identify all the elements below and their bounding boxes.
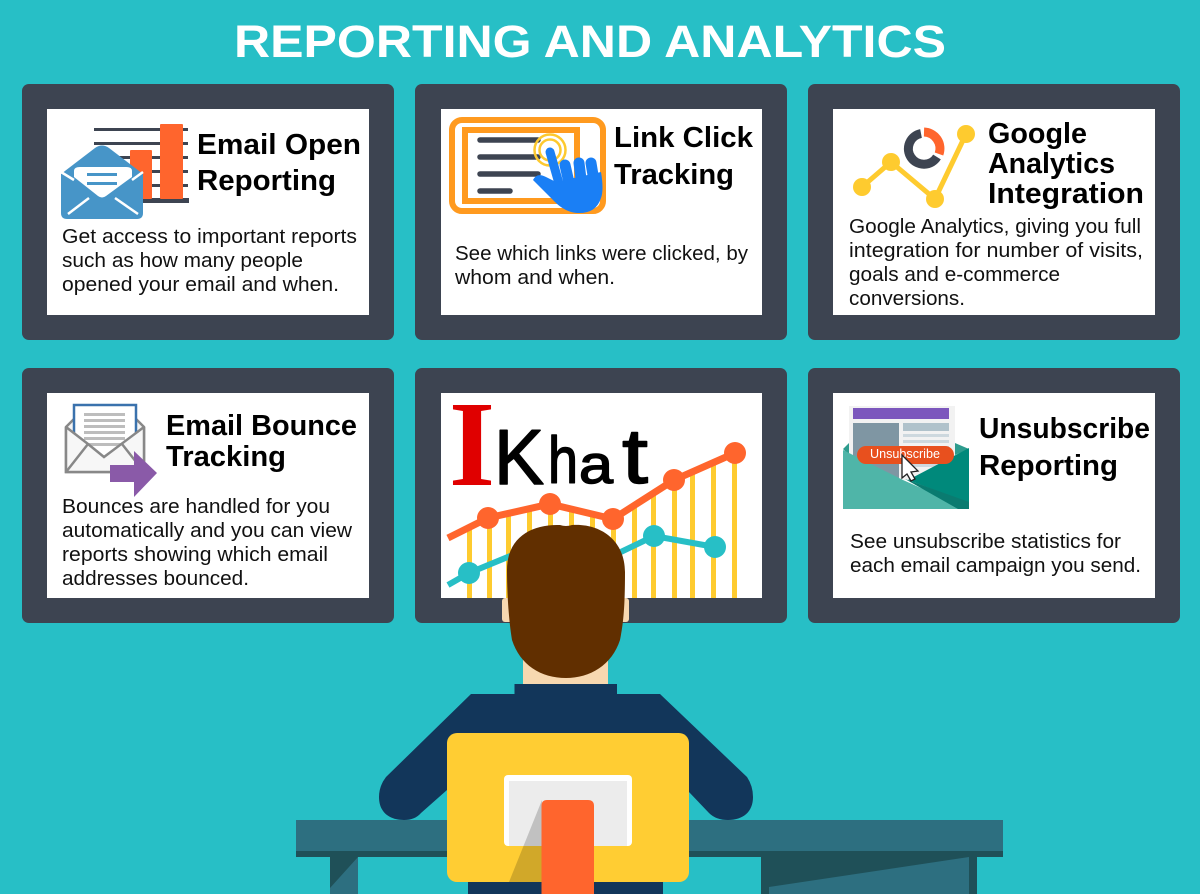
- logo: I Khat: a: [579, 435, 614, 495]
- heading: unsubscribe reporting: Reporting: [979, 450, 1118, 482]
- body text: unsubscribe: See unsubscribe statistics for: [850, 531, 1121, 553]
- logo: I Khat: [449, 377, 648, 512]
- ears: [502, 598, 629, 622]
- panel: link click tracking: [415, 84, 787, 340]
- body text: email open: Get access to important reports: [62, 226, 357, 248]
- heading: google analytics integration: Integration: [988, 178, 1144, 210]
- heading: unsubscribe reporting: Unsubscribe: [979, 413, 1150, 445]
- body text: email bounce: automatically and you can view: [62, 520, 353, 542]
- body text: google analytics: conversions.: [849, 288, 965, 310]
- chart: teal line: [448, 525, 726, 585]
- body text: google analytics: goals and e-commerce: [849, 264, 1060, 286]
- heading: google analytics integration: Analytics: [988, 148, 1115, 180]
- chart: orange line: [448, 442, 746, 538]
- body text: email bounce: reports showing which email: [62, 544, 328, 566]
- title: REPORTING AND ANALYTICS: [234, 16, 946, 67]
- person seen from behind: [379, 525, 753, 894]
- body text: email open: opened your email and when.: [62, 274, 339, 296]
- body text: link click: See which links were clicked, by: [455, 243, 748, 265]
- icon: bounced envelope: [66, 405, 157, 497]
- panel: ikhat monitor: [415, 368, 787, 623]
- desk: [296, 820, 1003, 894]
- logo: I Khat: h: [548, 423, 578, 497]
- body text: link click: whom and when.: [454, 267, 615, 289]
- body text: google analytics: integration for number of visits,: [849, 240, 1143, 262]
- logo: I Khat: t: [622, 412, 648, 500]
- chair: [447, 733, 689, 894]
- body text: email bounce: addresses bounced.: [62, 568, 249, 590]
- heading: link click tracking: Link Click: [614, 122, 754, 154]
- panel: google analytics integration: [808, 84, 1180, 340]
- logo: I Khat: I: [449, 377, 495, 512]
- heading: email bounce tracking: Tracking: [166, 441, 286, 473]
- heading: link click tracking: [614, 122, 754, 191]
- panel: email bounce tracking: [22, 368, 394, 623]
- chart: yellow bars: [467, 453, 737, 598]
- body text: email bounce: [62, 496, 353, 590]
- body text: email bounce: Bounces are handled for you: [62, 496, 330, 518]
- heading: link click tracking: Tracking: [614, 159, 734, 191]
- body and arms: [379, 684, 753, 894]
- body text: google analytics: Google Analytics, giving you full: [849, 216, 1141, 238]
- icon: analytics line chart: [853, 125, 975, 208]
- body text: link click: [454, 243, 748, 289]
- neck: [523, 650, 608, 690]
- heading: email open reporting: Email Open: [197, 129, 361, 161]
- heading: email bounce tracking: Email Bounce: [166, 410, 357, 442]
- heading: google analytics integration: Google: [988, 118, 1087, 150]
- body text: google analytics: [849, 216, 1143, 310]
- body text: email open: [62, 226, 357, 296]
- icon: link click: [452, 120, 603, 213]
- panel: email open reporting: [22, 84, 394, 340]
- body text: unsubscribe: [850, 531, 1141, 577]
- heading: google analytics integration: [988, 118, 1144, 210]
- body text: email open: such as how many people: [62, 250, 303, 272]
- logo: I Khat: K: [494, 413, 544, 501]
- icon: unsubscribe envelope: Unsubscribe: [870, 447, 940, 461]
- icon: unsubscribe envelope: [843, 406, 969, 509]
- panel: unsubscribe reporting: [808, 368, 1180, 623]
- body text: unsubscribe: each email campaign you send.: [850, 555, 1141, 577]
- heading: email bounce tracking: [166, 410, 357, 473]
- heading: email open reporting: Reporting: [197, 165, 336, 197]
- hair: [507, 525, 625, 678]
- heading: unsubscribe reporting: [979, 413, 1150, 482]
- heading: email open reporting: [197, 129, 361, 197]
- icon: email open chart: [61, 124, 189, 219]
